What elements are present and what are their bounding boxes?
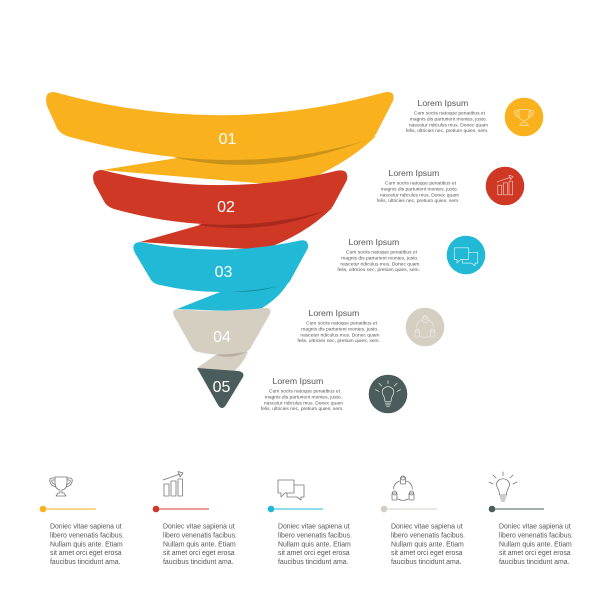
text block 1: Lorem Ipsum bbox=[418, 98, 468, 108]
text block 1: nascetur ridiculus mus. Donec quam bbox=[409, 122, 488, 128]
icon: trophy bbox=[50, 477, 72, 496]
text block 4: magnis dis parturient montes, justo. bbox=[301, 326, 378, 332]
number 02: 02 bbox=[217, 199, 235, 216]
description 4: faucibus tincidunt ama. bbox=[391, 559, 462, 566]
icon: chart bbox=[163, 472, 183, 496]
text block 2: Lorem Ipsum bbox=[388, 168, 439, 178]
timeline marker 4 bbox=[381, 506, 437, 512]
description 5: faucibus tincidunt ama. bbox=[499, 559, 570, 566]
description 3 bbox=[278, 524, 352, 566]
text block 3: Cum sociis natoque penatibus et bbox=[346, 250, 418, 256]
segment 02 band bbox=[93, 170, 347, 225]
number 05: 05 bbox=[213, 379, 230, 396]
text block 2: felis, ultricies nec, pretium quies, sem. bbox=[377, 198, 460, 204]
description 1 bbox=[50, 524, 124, 566]
text block 4: Lorem Ipsum bbox=[308, 308, 359, 318]
text block 5 bbox=[261, 376, 344, 412]
text block 3: nascetur ridiculus mus. Donec quam bbox=[340, 261, 420, 267]
segment 04 tail bbox=[197, 352, 248, 373]
text block 2: nascetur ridiculus mus. Donec quam bbox=[380, 192, 459, 198]
column 5 bbox=[489, 472, 573, 566]
description 2: Nullam quis ante. Etiam bbox=[163, 541, 236, 548]
text block 5: nascetur ridiculus mus. Donec quam bbox=[264, 400, 343, 406]
segment 01 tail bbox=[102, 137, 375, 186]
timeline marker 1 bbox=[40, 506, 96, 512]
description 5 bbox=[499, 524, 573, 566]
description 1: Doniec vitae sapiena ut bbox=[50, 524, 122, 530]
text block 4: nascetur ridiculus mus. Donec quam bbox=[300, 332, 380, 338]
icon circle: network bbox=[406, 308, 444, 346]
icon: network bbox=[392, 476, 414, 500]
description 1: libero venenatis facibus. bbox=[50, 532, 124, 539]
segment 02 tail bbox=[140, 208, 332, 250]
description 5: Nullam quis ante. Etiam bbox=[499, 541, 572, 548]
icon circle: chart bbox=[486, 167, 524, 205]
description 4: Nullam quis ante. Etiam bbox=[391, 541, 464, 548]
icon circle: trophy bbox=[505, 98, 543, 136]
text block 2 bbox=[377, 168, 460, 204]
text block 1: felis, ultricies nec, pretium quies, sem. bbox=[406, 128, 488, 134]
text block 3: felis, ultricies nec, pretium quies, sem. bbox=[337, 267, 420, 273]
text block 1: magnis dis parturient montes, justo. bbox=[410, 116, 487, 122]
column 2 bbox=[153, 472, 237, 566]
description 2: sit amet orci eget erosa bbox=[163, 550, 235, 557]
text block 2: magnis dis parturient montes, justo. bbox=[381, 186, 458, 192]
timeline marker 5 bbox=[489, 506, 544, 512]
segment 03 band bbox=[133, 240, 308, 292]
column 4 bbox=[381, 476, 465, 566]
segment 05 triangle bbox=[197, 368, 243, 408]
text block 1: Cum sociis natoque penatibus et bbox=[414, 111, 486, 117]
segment 04 band bbox=[173, 308, 270, 354]
icon circle: bulb bbox=[369, 375, 407, 413]
text block 1 bbox=[406, 98, 488, 134]
segment 01 band bbox=[46, 92, 394, 160]
segment 03 tail bbox=[177, 283, 288, 312]
text block 3 bbox=[337, 237, 420, 273]
text block 4: felis, ultricies nec, pretium quies, sem. bbox=[297, 338, 380, 344]
column 3 bbox=[268, 480, 352, 566]
text block 5: Cum sociis natoque penatibus et bbox=[269, 389, 341, 395]
text block 4: Cum sociis natoque penatibus et bbox=[306, 321, 378, 327]
icon circle: chat bbox=[447, 236, 485, 274]
description 4: Doniec vitae sapiena ut bbox=[391, 524, 463, 530]
description 4: sit amet orci eget erosa bbox=[391, 550, 463, 557]
description 1: Nullam quis ante. Etiam bbox=[50, 541, 123, 548]
description 1: faucibus tincidunt ama. bbox=[50, 559, 121, 566]
timeline marker 3 bbox=[268, 506, 323, 512]
description 5: Doniec vitae sapiena ut bbox=[499, 524, 571, 530]
icon: bulb bbox=[489, 472, 517, 501]
description 3: Nullam quis ante. Etiam bbox=[278, 541, 351, 548]
description 2: libero venenatis facibus. bbox=[163, 532, 237, 539]
text block 3: Lorem Ipsum bbox=[348, 237, 399, 247]
text block 3: magnis dis parturient montes, justo. bbox=[341, 256, 418, 262]
description 1: sit amet orci eget erosa bbox=[50, 550, 122, 557]
description 3: sit amet orci eget erosa bbox=[278, 550, 350, 557]
description 3: faucibus tincidunt ama. bbox=[278, 559, 349, 566]
funnel bbox=[46, 92, 394, 408]
column 1 bbox=[40, 477, 124, 566]
description 4 bbox=[391, 524, 465, 566]
description 5: libero venenatis facibus. bbox=[499, 532, 573, 539]
text block 2: Cum sociis natoque penatibus et bbox=[385, 181, 457, 187]
description 3: Doniec vitae sapiena ut bbox=[278, 524, 350, 530]
description 2 bbox=[163, 524, 237, 566]
icon: chat bbox=[278, 480, 304, 500]
description 2: faucibus tincidunt ama. bbox=[163, 559, 234, 566]
text block 5: felis, ultricies nec, pretium quies, sem. bbox=[261, 406, 344, 412]
number 03: 03 bbox=[215, 264, 232, 281]
description 2: Doniec vitae sapiena ut bbox=[163, 524, 235, 530]
number 01: 01 bbox=[219, 131, 236, 148]
number 04: 04 bbox=[213, 329, 231, 346]
timeline marker 2 bbox=[153, 506, 209, 512]
text block 5: Lorem Ipsum bbox=[272, 376, 323, 386]
description 3: libero venenatis facibus. bbox=[278, 532, 352, 539]
description 5: sit amet orci eget erosa bbox=[499, 550, 571, 557]
text block 4 bbox=[297, 308, 380, 344]
text block 5: magnis dis parturient montes, justo. bbox=[265, 394, 342, 400]
description 4: libero venenatis facibus. bbox=[391, 532, 465, 539]
